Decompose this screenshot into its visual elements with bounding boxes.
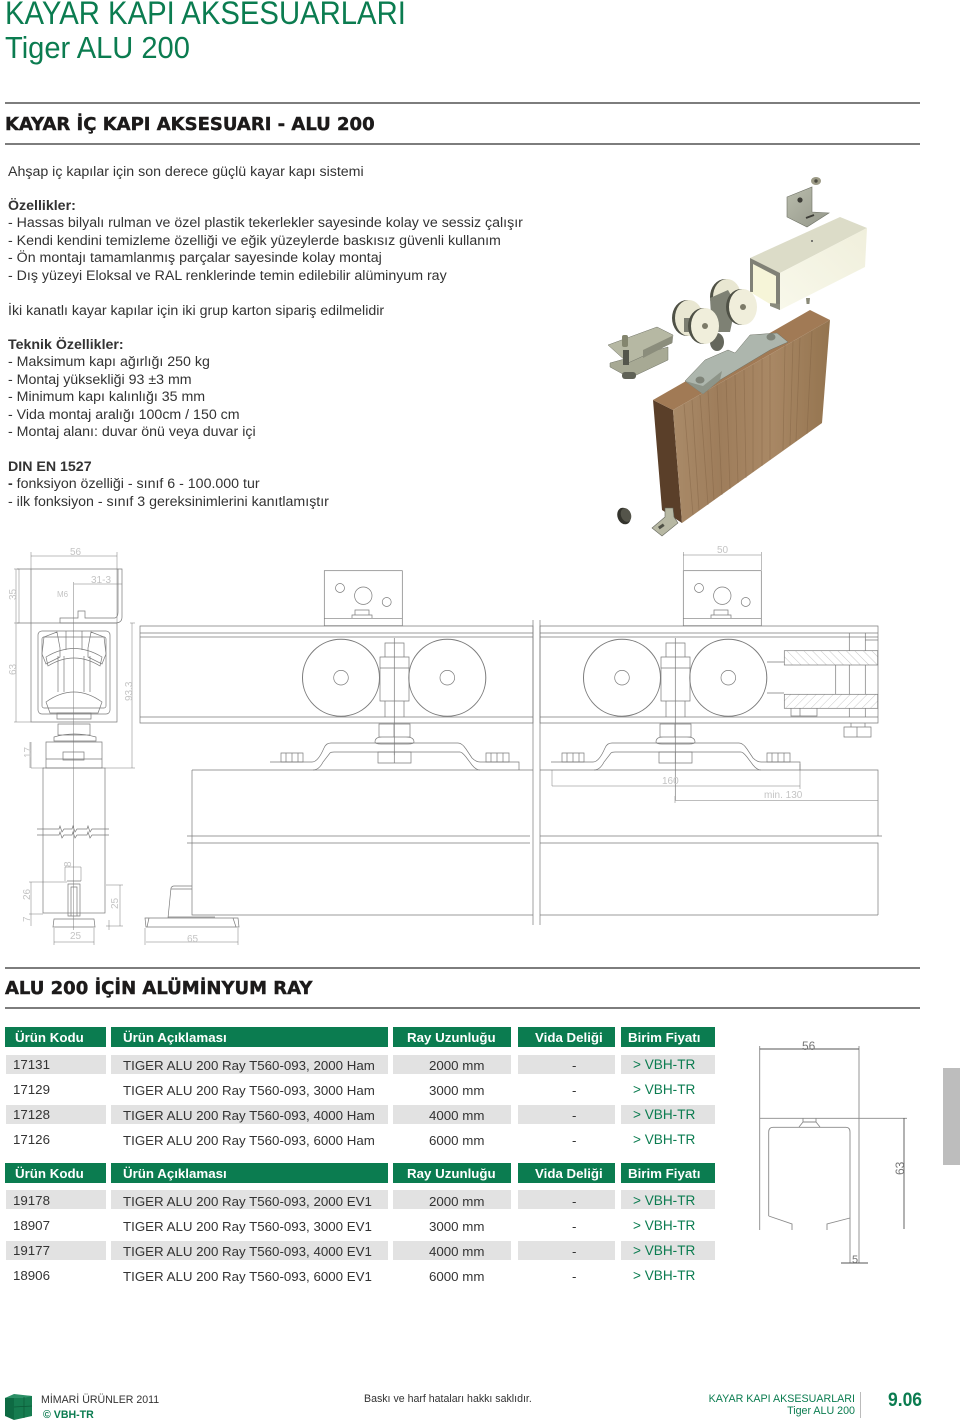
table header: Birim Fiyatı (628, 1166, 700, 1181)
row 19177: > VBH-TR (633, 1243, 695, 1258)
row 17129: 3000 mm (429, 1083, 484, 1098)
row 17131: 17131 (13, 1057, 50, 1072)
table header: Ürün Kodu (15, 1166, 84, 1181)
text block: din en 1527 (8, 459, 329, 510)
table: ev1 rails (5, 1163, 715, 1284)
row 17128: 4000 mm (429, 1108, 484, 1123)
row 19178 (6, 1190, 715, 1209)
footer: publication (41, 1394, 159, 1421)
table header: Ray Uzunluğu (407, 1166, 496, 1181)
text block: din en 1527: DIN EN 1527 (8, 459, 92, 475)
dimension labels: M6 (57, 590, 69, 599)
dimension labels: 8 (63, 861, 74, 867)
dimension labels (8, 545, 803, 945)
row 17131: - (572, 1058, 576, 1073)
roller assembly left (270, 638, 519, 770)
text block: özellikler: - Hassas bilyalı rulman ve özel plastik tekerlekler sayesinde kolay ve sessiz çalışır (8, 215, 523, 231)
side tab (943, 1068, 960, 1165)
row 17126: > VBH-TR (633, 1132, 695, 1147)
row 17129 (13, 1082, 695, 1098)
dimension labels: 160 (662, 776, 679, 787)
dimension labels: 31-3 (91, 575, 111, 586)
row 17129: 17129 (13, 1082, 50, 1097)
row 19178: > VBH-TR (633, 1193, 695, 1208)
table header: Birim Fiyatı (628, 1030, 700, 1045)
table header: Ürün Açıklaması (123, 1030, 227, 1045)
text block: özellikler: - Dış yüzeyi Eloksal ve RAL renklerinde temin edilebilir alüminyum ray (8, 268, 447, 284)
row 17131: TIGER ALU 200 Ray T560-093, 2000 Ham (123, 1058, 375, 1073)
title: Tiger ALU 200 (5, 31, 190, 65)
footer: disclaimer: Baskı ve harf hataları hakkı saklıdır. (364, 1392, 532, 1404)
text block: teknik özellikler: - Montaj alanı: duvar önü veya duvar içi (8, 424, 256, 440)
dimension lines (145, 552, 878, 945)
row 17131: 2000 mm (429, 1058, 484, 1073)
row 17131 (6, 1055, 715, 1074)
row 19177: - (572, 1244, 576, 1259)
dimension labels: 26 (22, 888, 33, 900)
door panel (653, 310, 830, 523)
text block: özellikler: - Kendi kendini temizleme özelliği ve eğik yüzeylerde baskısız güvenli kullanım (8, 233, 501, 249)
text block: kanat notu: İki kanatlı kayar kapılar için iki grup karton sipariş edilmelidir (8, 302, 384, 318)
row 18907: 3000 mm (429, 1219, 484, 1234)
table header: Ürün Açıklaması (123, 1166, 227, 1181)
rollers (672, 279, 757, 351)
profile drawing of rail section: 56 (802, 1039, 816, 1053)
row 17126 (13, 1132, 695, 1148)
profile drawing of rail section: 5 (852, 1254, 858, 1266)
footer: section name: Tiger ALU 200 (787, 1405, 855, 1417)
footer: section name (709, 1392, 855, 1417)
text block: teknik özellikler: Teknik Özellikler: (8, 337, 124, 353)
roller assembly right (551, 638, 800, 800)
row 17128: TIGER ALU 200 Ray T560-093, 4000 Ham (123, 1108, 375, 1123)
hatched section of second rail (767, 633, 878, 737)
row 18906: > VBH-TR (633, 1268, 695, 1283)
row 18906: 6000 mm (429, 1269, 484, 1284)
row 18907: - (572, 1219, 576, 1234)
table header (5, 1163, 715, 1183)
door plate (685, 333, 788, 394)
text block: din en 1527: - ilk fonksiyon - sınıf 3 gereksinimlerini kanıtlamıştır (8, 494, 329, 510)
title (5, 0, 406, 65)
row 17128: - (572, 1108, 576, 1123)
profile drawing of rail section (760, 1039, 907, 1266)
row 19178: - (572, 1194, 576, 1209)
row 18906: - (572, 1269, 576, 1284)
row 18907 (13, 1218, 695, 1234)
dimensions drawn as thin lines (14, 552, 135, 945)
stopper (615, 506, 633, 526)
row 17131: > VBH-TR (633, 1057, 695, 1072)
row 17128: > VBH-TR (633, 1107, 695, 1122)
section heading: kayar iç kapı aksesuarı: KAYAR İÇ KAPI AKSESUARI - ALU 200 (5, 114, 375, 135)
text block: intro: Ahşap iç kapılar için son derece güçlü kayar kapı sistemi (8, 164, 364, 180)
row 18907: TIGER ALU 200 Ray T560-093, 3000 EV1 (123, 1219, 372, 1234)
dimension labels: 25 (70, 931, 82, 942)
row 18907: 18907 (13, 1218, 50, 1233)
wall bracket 1 (324, 571, 402, 626)
row 19178: TIGER ALU 200 Ray T560-093, 2000 EV1 (123, 1194, 372, 1209)
aluminium rail (750, 217, 867, 310)
row 18906 (13, 1268, 695, 1284)
footer: page number: 9.06 (888, 1390, 922, 1411)
row 19178: 2000 mm (429, 1194, 484, 1209)
ceiling bracket (787, 177, 829, 227)
text block: teknik özellikler: - Vida montaj aralığı 100cm / 150 cm (8, 407, 240, 423)
dimension labels: 50 (717, 545, 729, 556)
table header: Vida Deliği (535, 1030, 603, 1045)
row 19177 (6, 1241, 715, 1260)
footer: section name: KAYAR KAPI AKSESUARLARI (709, 1392, 855, 1404)
row 19177: 4000 mm (429, 1244, 484, 1259)
footer: publication: MİMARİ ÜRÜNLER 2011 (41, 1394, 159, 1406)
floor guide (145, 886, 239, 927)
row 19178: 19178 (13, 1193, 50, 1208)
rail (140, 620, 878, 925)
text block: teknik özellikler: - Maksimum kapı ağırlığı 250 kg (8, 354, 210, 370)
row 17126: TIGER ALU 200 Ray T560-093, 6000 Ham (123, 1133, 375, 1148)
row 18906: TIGER ALU 200 Ray T560-093, 6000 EV1 (123, 1269, 372, 1284)
text block: teknik özellikler: - Montaj yüksekliği 93 ±3 mm (8, 372, 192, 388)
clamp (608, 327, 673, 379)
dimension labels: 17 (23, 746, 34, 758)
technical drawing: front elevation (140, 552, 882, 945)
dimension labels: min. 130 (764, 790, 803, 801)
text block: teknik özellikler (8, 337, 256, 440)
footer logo icon (5, 1394, 32, 1420)
technical drawing: side section (14, 552, 135, 945)
dimension labels: 7 (22, 916, 33, 922)
row 19177: TIGER ALU 200 Ray T560-093, 4000 EV1 (123, 1244, 372, 1259)
text block: özellikler: - Ön montajı tamamlanmış parçalar sayesinde kolay montaj (8, 250, 382, 266)
row 17129: TIGER ALU 200 Ray T560-093, 3000 Ham (123, 1083, 375, 1098)
row 17126: 17126 (13, 1132, 50, 1147)
row 17129: > VBH-TR (633, 1082, 695, 1097)
floor guide (652, 508, 678, 536)
text block: teknik özellikler: - Minimum kapı kalınlığı 35 mm (8, 389, 205, 405)
row 17129: - (572, 1083, 576, 1098)
row 17126: - (572, 1133, 576, 1148)
table header: Ray Uzunluğu (407, 1030, 496, 1045)
row 18906: 18906 (13, 1268, 50, 1283)
section heading: alüminyum ray: ALU 200 İÇİN ALÜMİNYUM RAY (5, 978, 312, 999)
table header (5, 1027, 715, 1047)
table header: Vida Deliği (535, 1166, 603, 1181)
row 17128 (6, 1105, 715, 1124)
dimension labels: 63 (8, 663, 19, 675)
dimension labels: 65 (187, 934, 199, 945)
table: ham rails (5, 1027, 715, 1148)
dimension labels: 25 (110, 897, 121, 909)
dimension labels: 93.3 (124, 681, 135, 701)
text block: özellikler (8, 198, 523, 284)
profile drawing of rail section: 63 (893, 1161, 907, 1175)
wall bracket 2 (683, 571, 761, 626)
text block: özellikler: Özellikler: (8, 198, 76, 214)
footer: publication: © VBH-TR (43, 1409, 94, 1421)
dimension labels: 56 (70, 547, 82, 558)
table header: Ürün Kodu (15, 1030, 84, 1045)
text block: din en 1527: - fonksiyon özelliği - sınıf 6 - 100.000 tur (8, 476, 260, 492)
row 18907: > VBH-TR (633, 1218, 695, 1233)
row 17128: 17128 (13, 1107, 50, 1122)
door leaf (187, 770, 882, 915)
row 19177: 19177 (13, 1243, 50, 1258)
row 17126: 6000 mm (429, 1133, 484, 1148)
dimension labels: 35 (8, 588, 19, 600)
